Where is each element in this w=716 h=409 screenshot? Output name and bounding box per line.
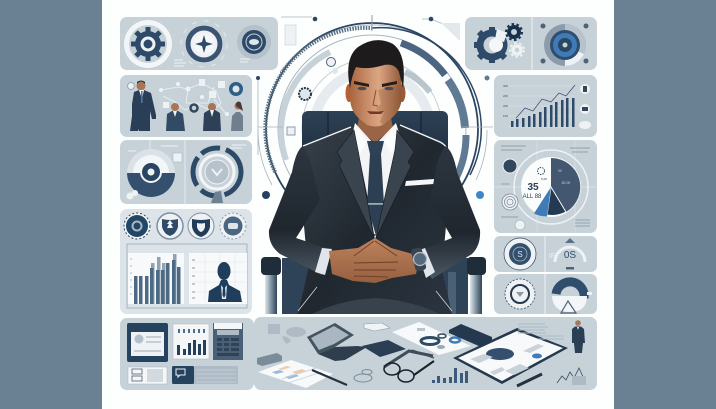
axis labels: 100: [503, 114, 508, 118]
icon: ballpoint pen: [312, 370, 347, 385]
axis labels: 300: [503, 84, 508, 88]
trend line: [516, 85, 575, 118]
icon: small dial: [237, 25, 271, 59]
icon: compass ring: [181, 21, 227, 67]
icon: big gear: [474, 27, 507, 63]
panel: shields and bar charts: [120, 209, 252, 314]
left armrest: [261, 257, 281, 314]
blue segments: [401, 43, 445, 75]
card: bar chart: [173, 324, 209, 359]
caption lines: [128, 145, 246, 151]
icon: small tag: [515, 220, 525, 230]
chair seat sides: [282, 258, 468, 314]
tie: [367, 141, 384, 236]
chart: gauge label: IF: [549, 253, 555, 260]
right cuff: [417, 248, 435, 278]
icon: fountain pen: [517, 374, 542, 386]
caption lines: [174, 59, 250, 66]
figure: executive in chair: [261, 40, 486, 314]
icon: cup ring: [354, 370, 372, 382]
pie: 5.00: [541, 177, 547, 181]
left arm: [269, 146, 332, 275]
panel bottom edge cover: [254, 314, 494, 317]
panel: target diagrams: [120, 140, 252, 204]
figure: colleague two: [203, 103, 221, 131]
bars: [511, 98, 574, 127]
panel: gears top right: [465, 17, 597, 70]
brows: [354, 81, 397, 87]
panel: office tools: [120, 318, 254, 390]
jacket torso: [297, 123, 453, 314]
text block lines: [518, 324, 564, 339]
bar chart: [128, 253, 184, 304]
caption lines: [501, 146, 590, 226]
document: charts sheet: [392, 322, 471, 355]
hands: [329, 238, 420, 283]
document: clipboard report: [453, 328, 568, 384]
pie: 35: [527, 182, 539, 193]
slice labels: [558, 169, 570, 185]
icon: black folder: [449, 324, 492, 347]
central hud rings: [258, 15, 493, 235]
pie: [514, 150, 588, 224]
outer thin arc: [280, 25, 460, 72]
panel: team network: [120, 75, 252, 137]
left side band: [0, 0, 102, 409]
icon: small gear: [190, 104, 198, 112]
icon: pen: [412, 350, 434, 358]
profile chart with silhouette: [189, 253, 247, 304]
axis labels: 200: [503, 104, 508, 108]
card: profile window: [127, 323, 168, 362]
icon: glasses: [384, 351, 434, 382]
face: [350, 62, 402, 126]
icon: dark emblem: [503, 159, 517, 173]
icon: device on desk: [257, 353, 282, 366]
card: message row: [172, 366, 238, 384]
chart: gauge label: 0S: [564, 250, 576, 261]
icon: laptop: [307, 323, 367, 361]
panel: gears and dials top left: [120, 17, 278, 70]
figure: colleague three: [231, 102, 243, 131]
icon: fingerprint: [502, 194, 518, 210]
figure: colleague one: [166, 103, 185, 131]
chart: desk bars: [432, 368, 468, 383]
document: spreadsheet: [258, 360, 333, 388]
icon: small dark gear: [506, 24, 522, 40]
trousers: [312, 298, 440, 314]
world map: [268, 324, 306, 344]
chart: gauge label: [549, 238, 585, 270]
chart: ring dial: [193, 148, 241, 203]
left lapel: [337, 130, 374, 238]
card: form thumbnail: [128, 367, 167, 384]
ears: [346, 84, 352, 102]
chart: ring emblem: [505, 279, 535, 309]
collar: [352, 123, 400, 154]
chart frame: [127, 244, 247, 308]
panel: rising bar chart: [494, 75, 597, 137]
right arm: [416, 146, 480, 279]
icon: cogs: [126, 190, 138, 200]
connector lines: [281, 17, 453, 28]
neck: [357, 108, 393, 143]
axis labels: 200: [503, 94, 508, 98]
shirt: [355, 123, 396, 238]
network lines: [161, 83, 227, 115]
panel: desk with documents: [254, 317, 597, 390]
figure: small businessman: [572, 320, 585, 353]
chart: small line: [557, 368, 584, 383]
dial corner markers: [540, 24, 588, 64]
right side band: [614, 0, 716, 409]
pie: ALL 88: [523, 194, 542, 200]
face shadow: [376, 85, 402, 125]
chart: half donut dial: [127, 149, 175, 197]
right armrest: [467, 257, 486, 314]
panel: pie chart: [494, 140, 597, 233]
chair back: [302, 111, 448, 161]
icon: small white gear: [510, 43, 524, 57]
shoulder highlight: [303, 125, 446, 147]
axis labels: [503, 84, 508, 118]
icon: gear badge: [124, 20, 172, 68]
chart: half gauge: [552, 282, 592, 313]
panel: dial pair: [494, 236, 597, 272]
hair: [348, 40, 404, 88]
head: [346, 40, 406, 127]
mouth: [367, 111, 384, 114]
icon: shield one: [157, 213, 183, 239]
inner rings: [278, 35, 466, 223]
network nodes: [159, 79, 229, 116]
chart: blue dial: [544, 24, 586, 66]
wristwatch: [410, 247, 427, 272]
slice labels: 50.00: [562, 181, 570, 185]
icon: gear badge: [229, 82, 243, 96]
pocket square: [405, 179, 434, 186]
icon: badge: [128, 82, 134, 90]
eyes: [358, 87, 366, 90]
figure: tall executive: [130, 80, 156, 131]
icon: box: [364, 323, 390, 331]
main ring: [266, 23, 478, 235]
left cuff: [315, 248, 332, 275]
icon: calculator: [213, 323, 243, 360]
icon: small tile: [173, 153, 182, 162]
right lapel: [376, 130, 414, 238]
nose: [373, 90, 378, 106]
panel: gauge pair: [494, 274, 597, 314]
slice labels: 00: [558, 169, 562, 173]
chart: ring dial: S: [517, 250, 523, 259]
icon: data tiles: [579, 84, 591, 129]
hud nodes: [256, 17, 490, 199]
icon: dish emblem: [220, 213, 246, 239]
icon: shield two: [188, 213, 214, 239]
icon: notebook: [362, 340, 406, 357]
icon: gear emblem: [124, 213, 150, 239]
